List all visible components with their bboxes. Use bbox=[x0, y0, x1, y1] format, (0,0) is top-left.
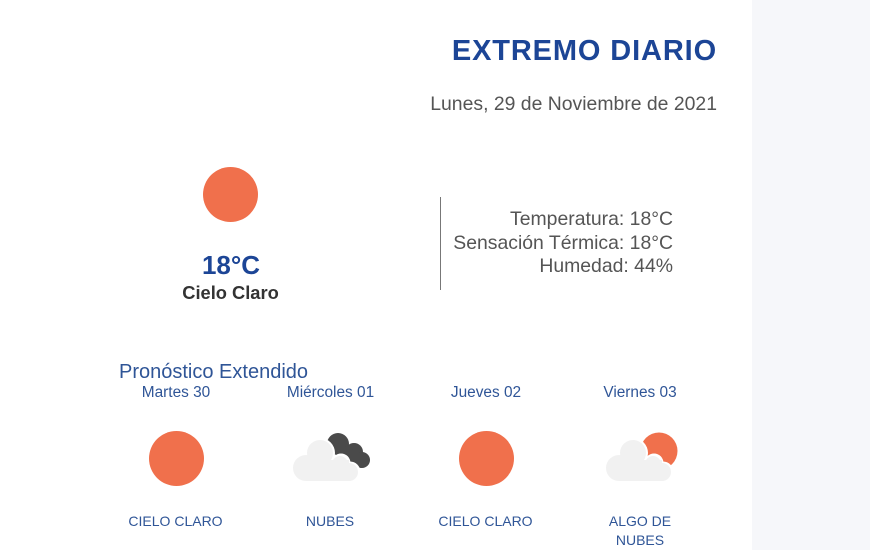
current details bbox=[453, 208, 673, 277]
icon: sun and cloud Viernes bbox=[606, 432, 678, 481]
icon: dark cloud Miércoles bbox=[293, 433, 370, 481]
side panel bbox=[752, 0, 870, 550]
label: Algo de Nubes: NUBES bbox=[616, 532, 664, 548]
current details: Sensación Térmica: 18°C bbox=[453, 232, 673, 254]
current details: Temperatura: 18°C bbox=[510, 208, 673, 230]
label: Cielo Claro Jueves: CIELO CLARO bbox=[438, 513, 533, 529]
day: Martes 30: Martes 30 bbox=[142, 384, 210, 401]
title: EXTREMO DIARIO bbox=[452, 35, 717, 67]
current condition: Cielo Claro bbox=[182, 282, 279, 303]
icon: current sun bbox=[203, 167, 258, 222]
extended forecast heading: Pronóstico Extendido bbox=[119, 360, 308, 382]
label: Algo de Nubes: ALGO DE bbox=[609, 512, 671, 528]
divider bbox=[440, 197, 441, 290]
icon: sun Jueves bbox=[459, 431, 514, 486]
day: Viernes 03: Viernes 03 bbox=[603, 384, 677, 401]
label: Cielo Claro Martes: CIELO CLARO bbox=[128, 513, 223, 529]
current temperature: 18°C bbox=[202, 250, 260, 280]
current details: Humedad: 44% bbox=[539, 255, 673, 277]
day: Miércoles 01: Miércoles 01 bbox=[287, 384, 374, 401]
label: Algo de Nubes bbox=[608, 512, 671, 548]
date: Lunes, 29 de Noviembre de 2021 bbox=[430, 92, 717, 114]
icon: sun Martes bbox=[149, 431, 204, 486]
day: Jueves 02: Jueves 02 bbox=[451, 384, 521, 401]
label: Nubes: NUBES bbox=[306, 513, 354, 529]
